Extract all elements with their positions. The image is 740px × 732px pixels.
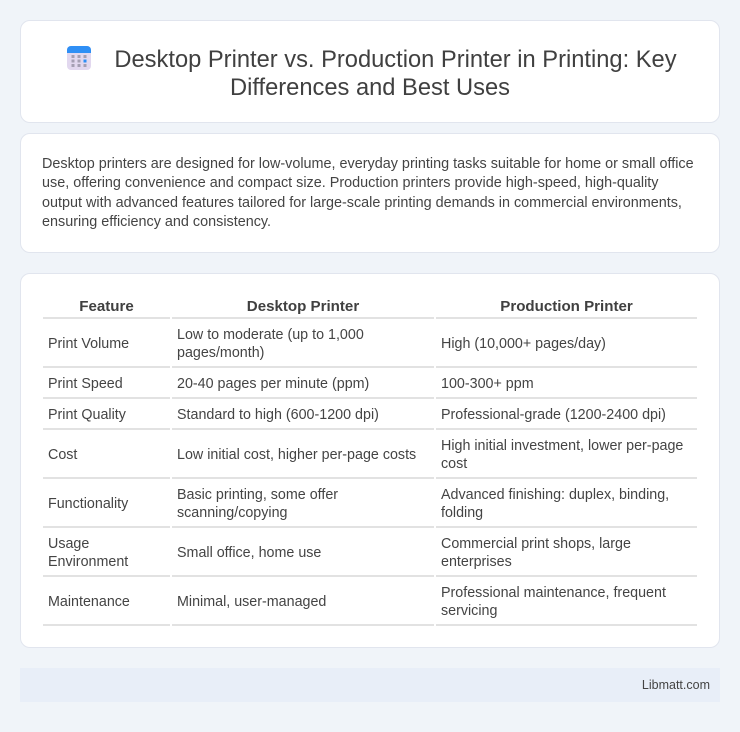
- comparison table: Standard to high (600-1200 dpi): [177, 407, 379, 423]
- row: print speed: Print Speed: [48, 376, 123, 392]
- intro text: Desktop printers are designed for low-volume, everyday printing tasks suitable for home or small office: [42, 156, 694, 172]
- header: production printer: Production Printer: [500, 298, 633, 315]
- comparison table: enterprises: [441, 554, 512, 570]
- comparison table: pages/month): [177, 345, 264, 361]
- row: usage environment: Usage: [48, 536, 89, 552]
- comparison table: Professional-grade (1200-2400 dpi): [441, 407, 666, 423]
- footer bar: [20, 668, 720, 702]
- row: print quality: Print Quality: [48, 407, 126, 423]
- row: usage environment: Environment: [48, 554, 128, 570]
- comparison table: Advanced finishing: duplex, binding,: [441, 487, 669, 503]
- footer credit: Libmatt.com: [642, 678, 710, 692]
- comparison table: [43, 298, 697, 626]
- header: feature: Feature: [79, 298, 134, 315]
- header: desktop printer: Desktop Printer: [247, 298, 359, 315]
- icon: calendar: [67, 46, 91, 70]
- intro text: use, offering convenience and compact size. Production printers provide high-speed, high-quality: [42, 175, 658, 191]
- row: functionality: Functionality: [48, 496, 128, 512]
- row: maintenance: Maintenance: [48, 594, 130, 610]
- comparison table: Minimal, user-managed: [177, 594, 326, 610]
- comparison table: Low to moderate (up to 1,000: [177, 327, 364, 343]
- comparison table: folding: [441, 505, 483, 521]
- row: cost: Cost: [48, 447, 77, 463]
- comparison table: Basic printing, some offer: [177, 487, 338, 503]
- table panel: [20, 273, 720, 648]
- comparison table: 100-300+ ppm: [441, 376, 534, 392]
- title: Differences and Best Uses: [230, 75, 510, 101]
- comparison table: Commercial print shops, large: [441, 536, 631, 552]
- row: usage environment: [48, 536, 128, 570]
- intro text: [42, 156, 694, 230]
- comparison table: High initial investment, lower per-page: [441, 438, 683, 454]
- comparison table: 20-40 pages per minute (ppm): [177, 376, 369, 392]
- comparison table: servicing: [441, 603, 497, 619]
- comparison table: scanning/copying: [177, 505, 287, 521]
- comparison table: Low initial cost, higher per-page costs: [177, 447, 416, 463]
- comparison table: cost: [441, 456, 467, 472]
- comparison table: Small office, home use: [177, 545, 321, 561]
- comparison table: Professional maintenance, frequent: [441, 585, 666, 601]
- header card: [20, 20, 720, 123]
- title: Desktop Printer vs. Production Printer in Printing: Key: [114, 47, 677, 73]
- intro text: output with advanced features tailored for large-scale printing demands in commercial environments,: [42, 194, 682, 210]
- row: print volume: Print Volume: [48, 336, 129, 352]
- comparison table: High (10,000+ pages/day): [441, 336, 606, 352]
- title: [114, 47, 677, 101]
- intro text: ensuring efficiency and consistency.: [42, 214, 271, 230]
- intro panel: [20, 133, 720, 253]
